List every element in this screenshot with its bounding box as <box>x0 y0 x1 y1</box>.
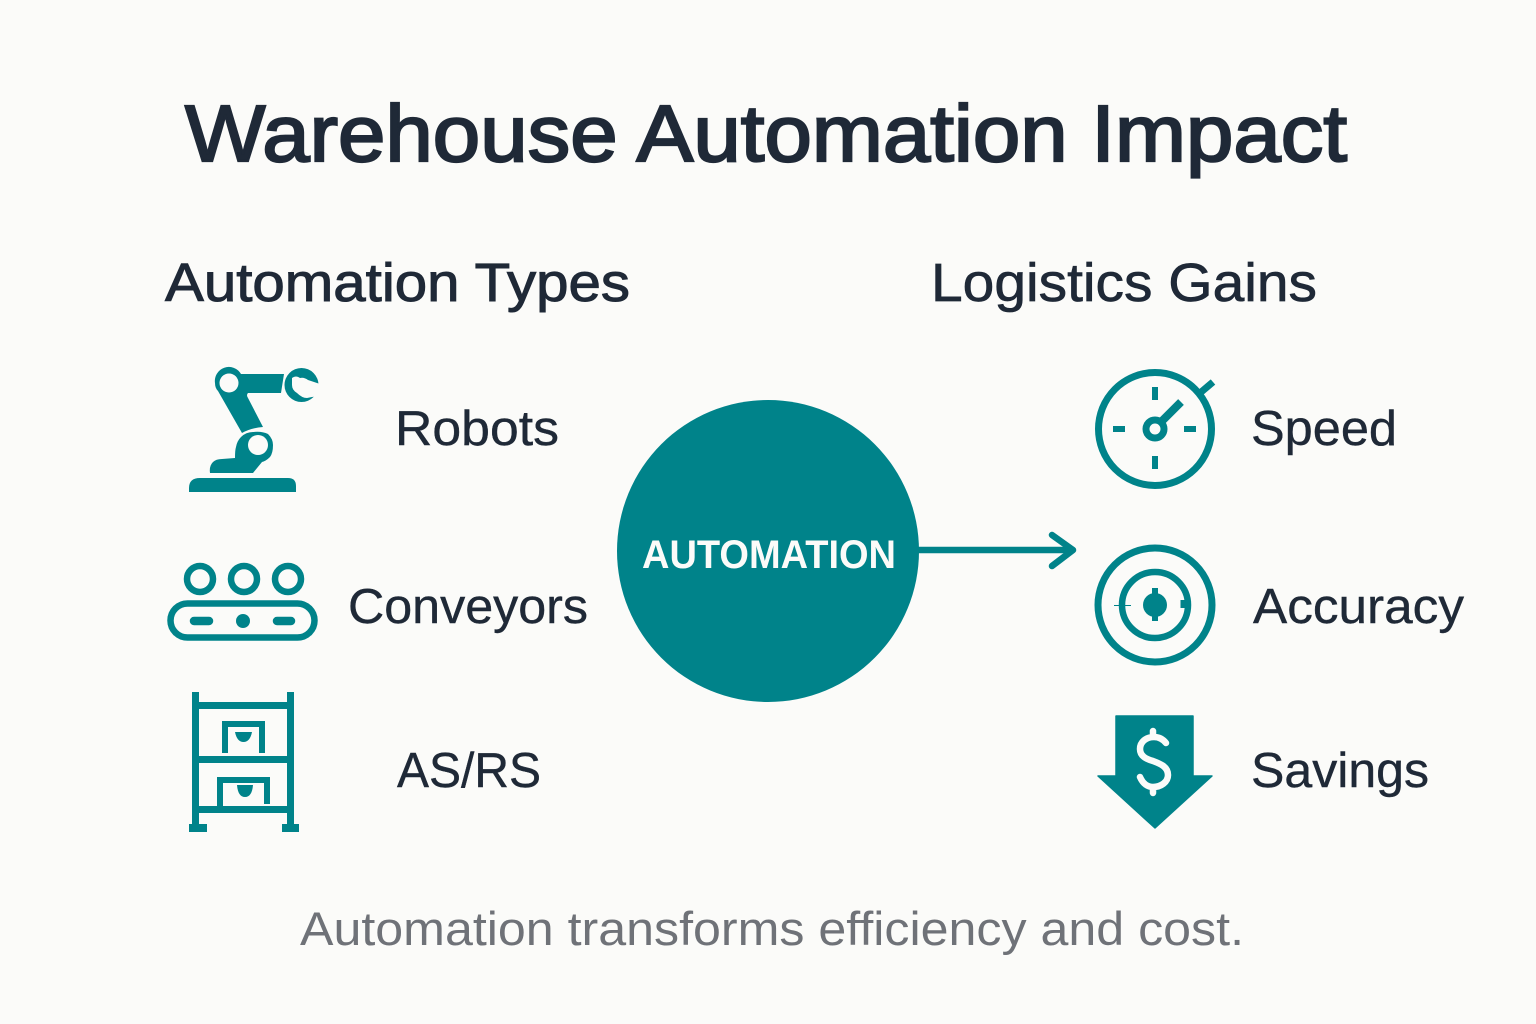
label: accuracy: Accuracy <box>1253 580 1465 634</box>
icon: storage rack <box>189 692 299 832</box>
center circle: automation: AUTOMATION <box>642 533 896 577</box>
center circle: automation <box>617 400 919 702</box>
title: Warehouse Automation Impact <box>185 89 1347 178</box>
icon: target <box>1098 548 1212 662</box>
arrow <box>918 535 1073 566</box>
heading: logistics gains: Logistics Gains <box>931 253 1317 313</box>
footer caption: Automation transforms efficiency and cost. <box>300 902 1244 955</box>
label: savings: Savings <box>1251 744 1429 798</box>
label: robots: Robots <box>395 402 559 456</box>
icon: stopwatch <box>1098 372 1213 486</box>
icon: savings arrow <box>1098 716 1212 828</box>
heading: automation types: Automation Types <box>165 253 630 313</box>
label: as/rs: AS/RS <box>397 744 541 798</box>
label: conveyors: Conveyors <box>348 580 588 634</box>
icon: conveyor belt <box>170 566 314 638</box>
label: speed: Speed <box>1251 402 1397 456</box>
icon: robot arm <box>189 367 320 492</box>
